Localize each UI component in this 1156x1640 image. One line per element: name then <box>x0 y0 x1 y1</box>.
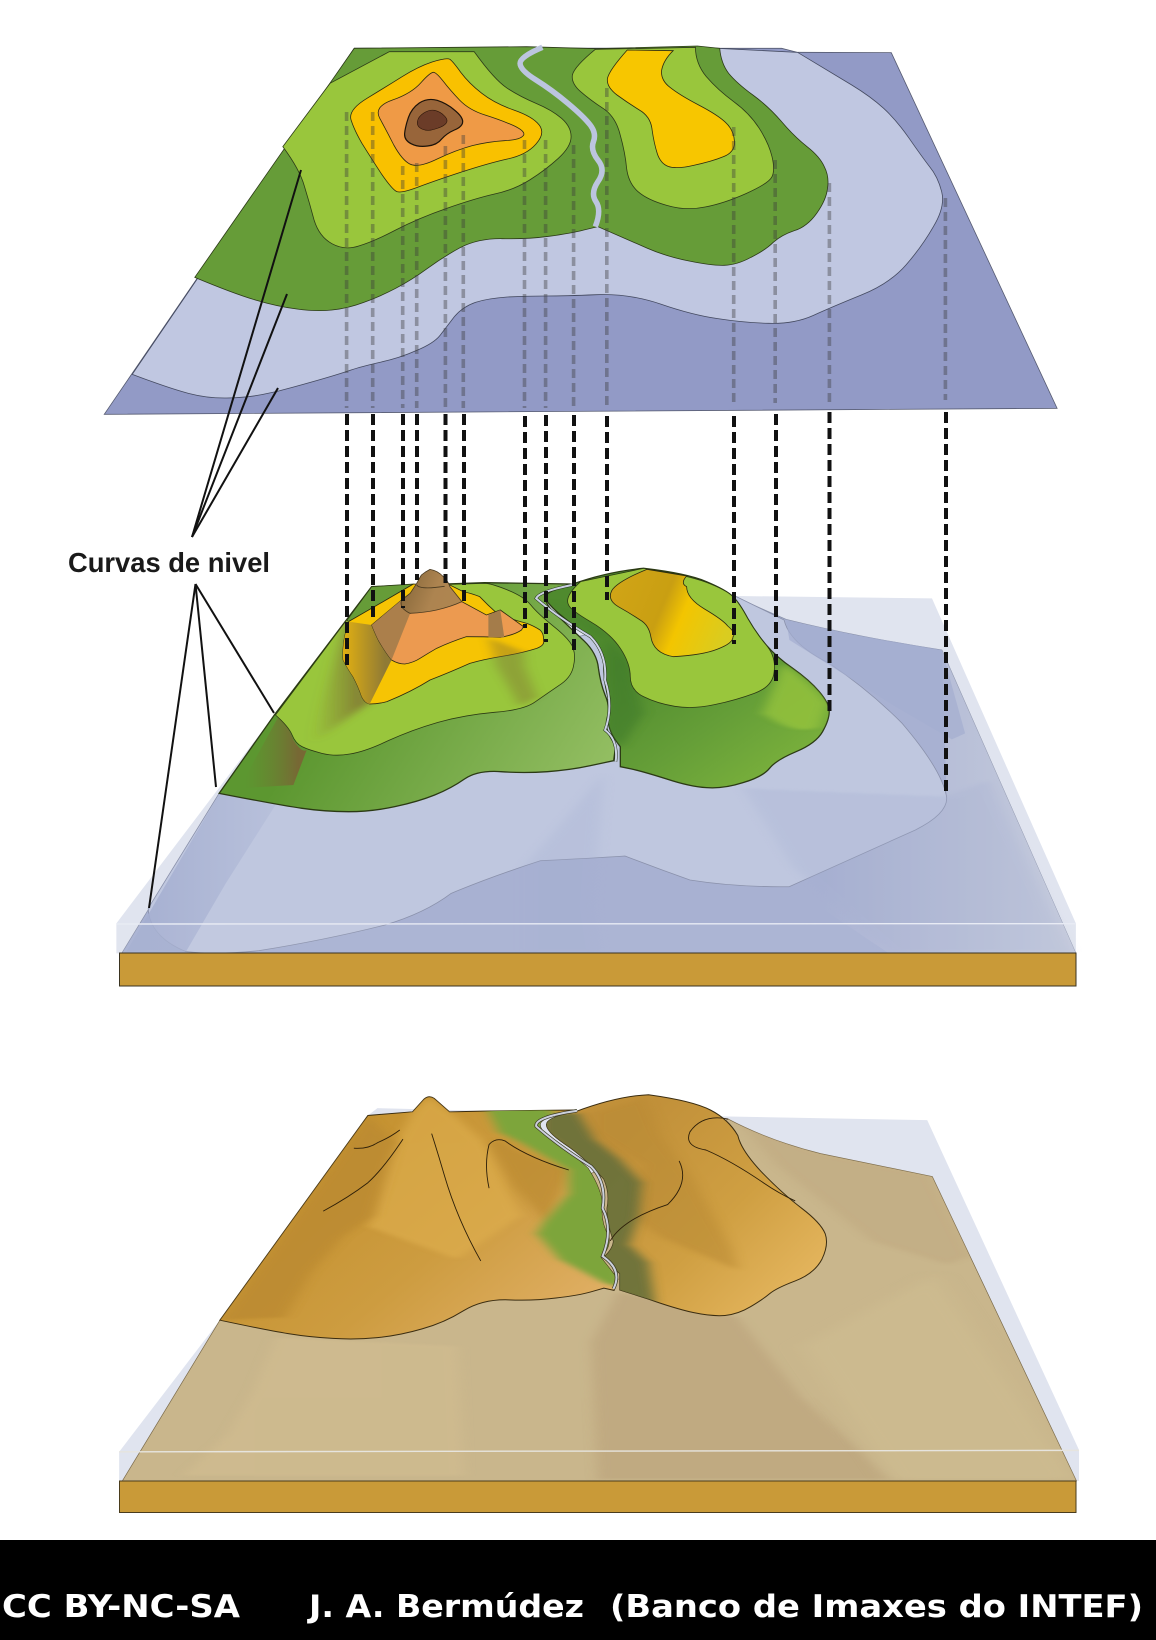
peak upper contour <box>417 585 445 588</box>
right hill <box>545 568 829 788</box>
spur shadow on orange <box>488 610 504 637</box>
panel: contour map laid on relief (middle) <box>116 568 1076 961</box>
light lip <box>763 663 828 730</box>
mountain body <box>220 1097 618 1339</box>
top-left dark green corner <box>347 584 413 622</box>
olive shade along the river <box>540 1113 655 1303</box>
corner shadow <box>239 716 307 788</box>
river on the relief <box>536 585 616 762</box>
contour band: lavender <box>132 48 943 398</box>
leader lines to the map contours <box>192 170 301 537</box>
contour band: yellow, left hill <box>351 59 542 192</box>
projection lines between map and relief <box>347 412 946 793</box>
dark green slope <box>219 583 616 812</box>
mountain body <box>546 1095 827 1316</box>
tan plain <box>122 1119 1076 1481</box>
contour band: light green, right hill <box>572 47 774 209</box>
base slab, bottom block <box>120 1481 1076 1512</box>
contour band: yellow, right hill <box>607 50 735 168</box>
contour band: lavender <box>148 597 947 953</box>
left slope shadow <box>220 1115 397 1320</box>
left mountain <box>220 1096 623 1339</box>
river on the map <box>520 47 602 227</box>
plate corner fold <box>122 953 186 961</box>
base plate: lowest level <box>122 597 1076 953</box>
right mountain <box>540 1095 827 1316</box>
yellow band <box>610 569 734 657</box>
light green band <box>276 583 575 755</box>
plain shading <box>183 1121 1076 1479</box>
panel: flat contour map (top) <box>104 46 1057 414</box>
base slab, middle block <box>120 953 1076 986</box>
translucent box behind the relief <box>119 1108 1079 1481</box>
contour band: orange <box>378 72 524 165</box>
yellow band: shaded left face <box>343 622 392 704</box>
yellow band <box>343 584 544 704</box>
orange band <box>372 600 524 664</box>
footer credits: (Banco de Imaxes do INTEF) <box>610 1589 1143 1625</box>
footer credits: CC BY-NC-SA <box>2 1589 240 1625</box>
front pane highlight <box>119 1450 1079 1452</box>
footer credits: J. A. Bermúdez <box>307 1589 584 1625</box>
leader lines to the relief contours <box>149 584 274 908</box>
projection lines inside the map (translucent dashes) <box>347 88 945 408</box>
contour band: brown <box>405 99 463 146</box>
ridge lines <box>323 1130 569 1261</box>
left hill <box>219 569 616 812</box>
dark green slope <box>545 568 829 788</box>
ridge lines <box>610 1118 795 1241</box>
spur shadow on lower bands <box>488 637 537 707</box>
base plate: lighter right side <box>789 650 1076 953</box>
river on the natural relief <box>536 1111 616 1289</box>
face shading <box>644 1164 736 1266</box>
peak <box>401 569 462 613</box>
map base: lowest level <box>104 48 1057 414</box>
label: Curvas de nivel: Curvas de nivel <box>68 547 270 578</box>
footer bar <box>0 1540 1156 1640</box>
summit: dark brown <box>417 110 447 130</box>
spur shadow <box>491 1142 566 1216</box>
plate shading <box>126 620 1071 952</box>
footer credits <box>2 1589 1143 1625</box>
valley shadow <box>608 652 644 746</box>
front pane highlight <box>116 923 1076 925</box>
front pane <box>116 924 1076 953</box>
panel: natural relief (bottom) <box>119 1095 1079 1481</box>
orange band: shaded left face <box>372 600 410 660</box>
green valley <box>486 1106 623 1288</box>
mountain slope shadow <box>318 622 374 734</box>
contour band: dark green <box>195 46 828 311</box>
translucent box behind the relief <box>116 587 1076 953</box>
lit ridge <box>368 1096 521 1259</box>
light green band <box>568 568 774 708</box>
contour band: light green, left hill <box>283 52 571 248</box>
